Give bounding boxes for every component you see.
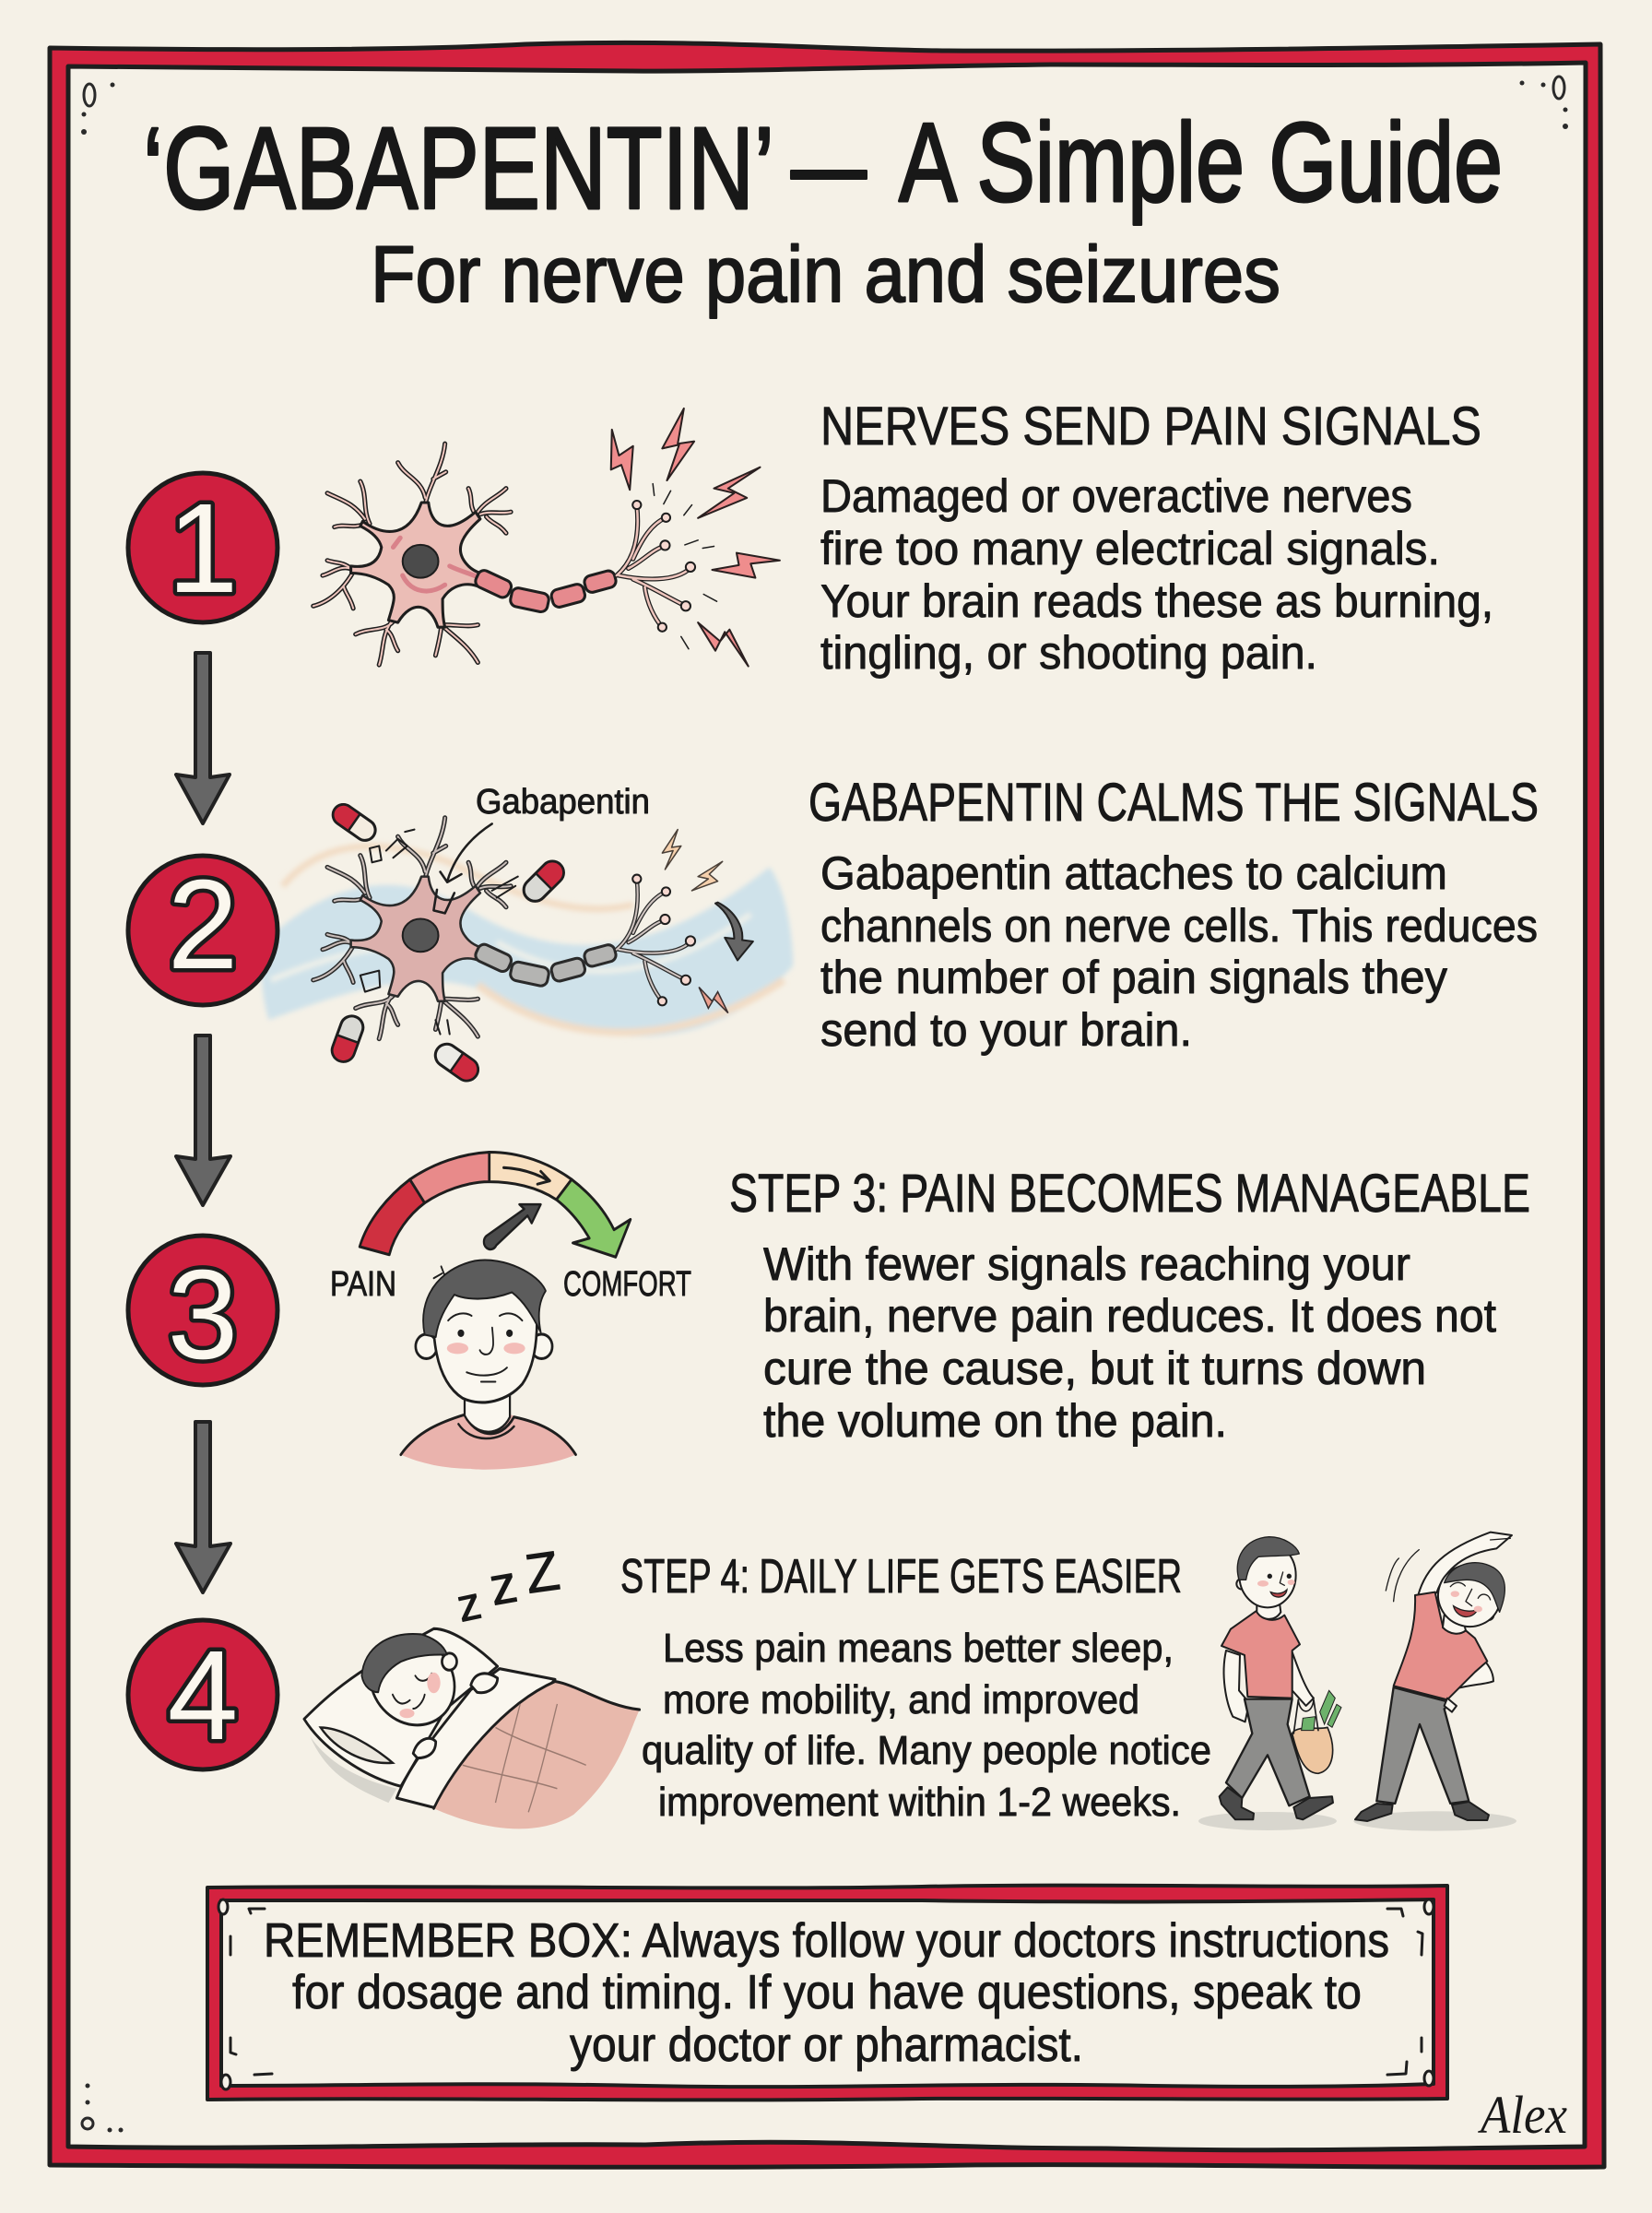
- step 2 number badge: [128, 854, 277, 1005]
- panel: remember box: [207, 1886, 1447, 2100]
- illustration: person sleeping in bed: [304, 1622, 640, 1828]
- title: ‘GABAPENTIN’: [143, 103, 774, 233]
- step 3 text: With fewer signals reaching your: [763, 1238, 1410, 1290]
- step 1 text: fire too many electrical signals.: [820, 523, 1440, 574]
- arrow: step 3 to 4: [176, 1422, 230, 1592]
- step 2 text: channels on nerve cells. This reduces: [820, 900, 1538, 952]
- signature: Alex: [1477, 2085, 1567, 2145]
- title: —: [791, 103, 867, 227]
- panel: remember box: REMEMBER BOX: Always follow your doctors instructions: [264, 1914, 1389, 1968]
- panel: remember box: your doctor or pharmacist.: [570, 2018, 1083, 2072]
- panel: remember box: for dosage and timing. If you have questions, speak to: [292, 1966, 1362, 2019]
- zzz sleep marks: [453, 1539, 563, 1632]
- step 1 text: NERVES SEND PAIN SIGNALS: [820, 396, 1481, 456]
- step 2 text: the number of pain signals they: [820, 952, 1447, 1003]
- label: Gabapentin: Gabapentin: [476, 783, 650, 822]
- step 1 text: tingling, or shooting pain.: [820, 627, 1317, 679]
- step 3 number badge: [128, 1236, 277, 1386]
- label: PAIN: PAIN: [330, 1265, 396, 1304]
- step 1 number badge: [128, 473, 277, 622]
- step 1 text: [820, 396, 1493, 679]
- label: COMFORT: COMFORT: [563, 1265, 691, 1304]
- step 2 text: send to your brain.: [820, 1004, 1192, 1056]
- step 1 text: Damaged or overactive nerves: [820, 470, 1412, 522]
- step 3 text: [729, 1164, 1530, 1447]
- title: [143, 100, 1503, 233]
- illustration: pain to comfort gauge: [360, 1152, 631, 1257]
- step 2 text: Gabapentin attaches to calcium: [820, 847, 1447, 899]
- step 4 number badge: [128, 1620, 277, 1769]
- subtitle: For nerve pain and seizures: [371, 231, 1280, 319]
- illustration: smiling person: [401, 1260, 576, 1470]
- illustration: firing neuron: [313, 408, 780, 667]
- illustration: walking and stretching people: [1198, 1533, 1516, 1831]
- illustration: calmed neuron with gabapentin: [262, 800, 793, 1085]
- step 4 text: improvement within 1-2 weeks.: [658, 1780, 1181, 1825]
- step 4 text: [620, 1550, 1211, 1825]
- step 1 text: Your brain reads these as burning,: [820, 575, 1493, 627]
- zzz sleep marks: Z: [521, 1539, 563, 1605]
- zzz sleep marks: z: [485, 1554, 522, 1617]
- step 3 number badge: 3: [168, 1244, 238, 1386]
- title: A Simple Guide: [899, 100, 1503, 225]
- step 3 text: cure the cause, but it turns down: [763, 1343, 1426, 1394]
- zzz sleep marks: z: [453, 1577, 486, 1632]
- step 2 number badge: 2: [168, 854, 238, 996]
- step 4 text: quality of life. Many people notice: [642, 1728, 1211, 1773]
- step 4 number badge: 4: [168, 1625, 238, 1767]
- arrow: step 2 to 3: [176, 1035, 230, 1205]
- step 3 text: the volume on the pain.: [763, 1395, 1227, 1447]
- arrow: step 1 to 2: [176, 653, 230, 823]
- step 4 text: STEP 4: DAILY LIFE GETS EASIER: [620, 1550, 1182, 1604]
- step 2 text: [808, 773, 1539, 1056]
- step 3 text: brain, nerve pain reduces. It does not: [763, 1290, 1496, 1342]
- step 4 text: Less pain means better sleep,: [663, 1626, 1174, 1671]
- step 4 text: more mobility, and improved: [663, 1677, 1139, 1722]
- step 1 number badge: 1: [168, 478, 238, 620]
